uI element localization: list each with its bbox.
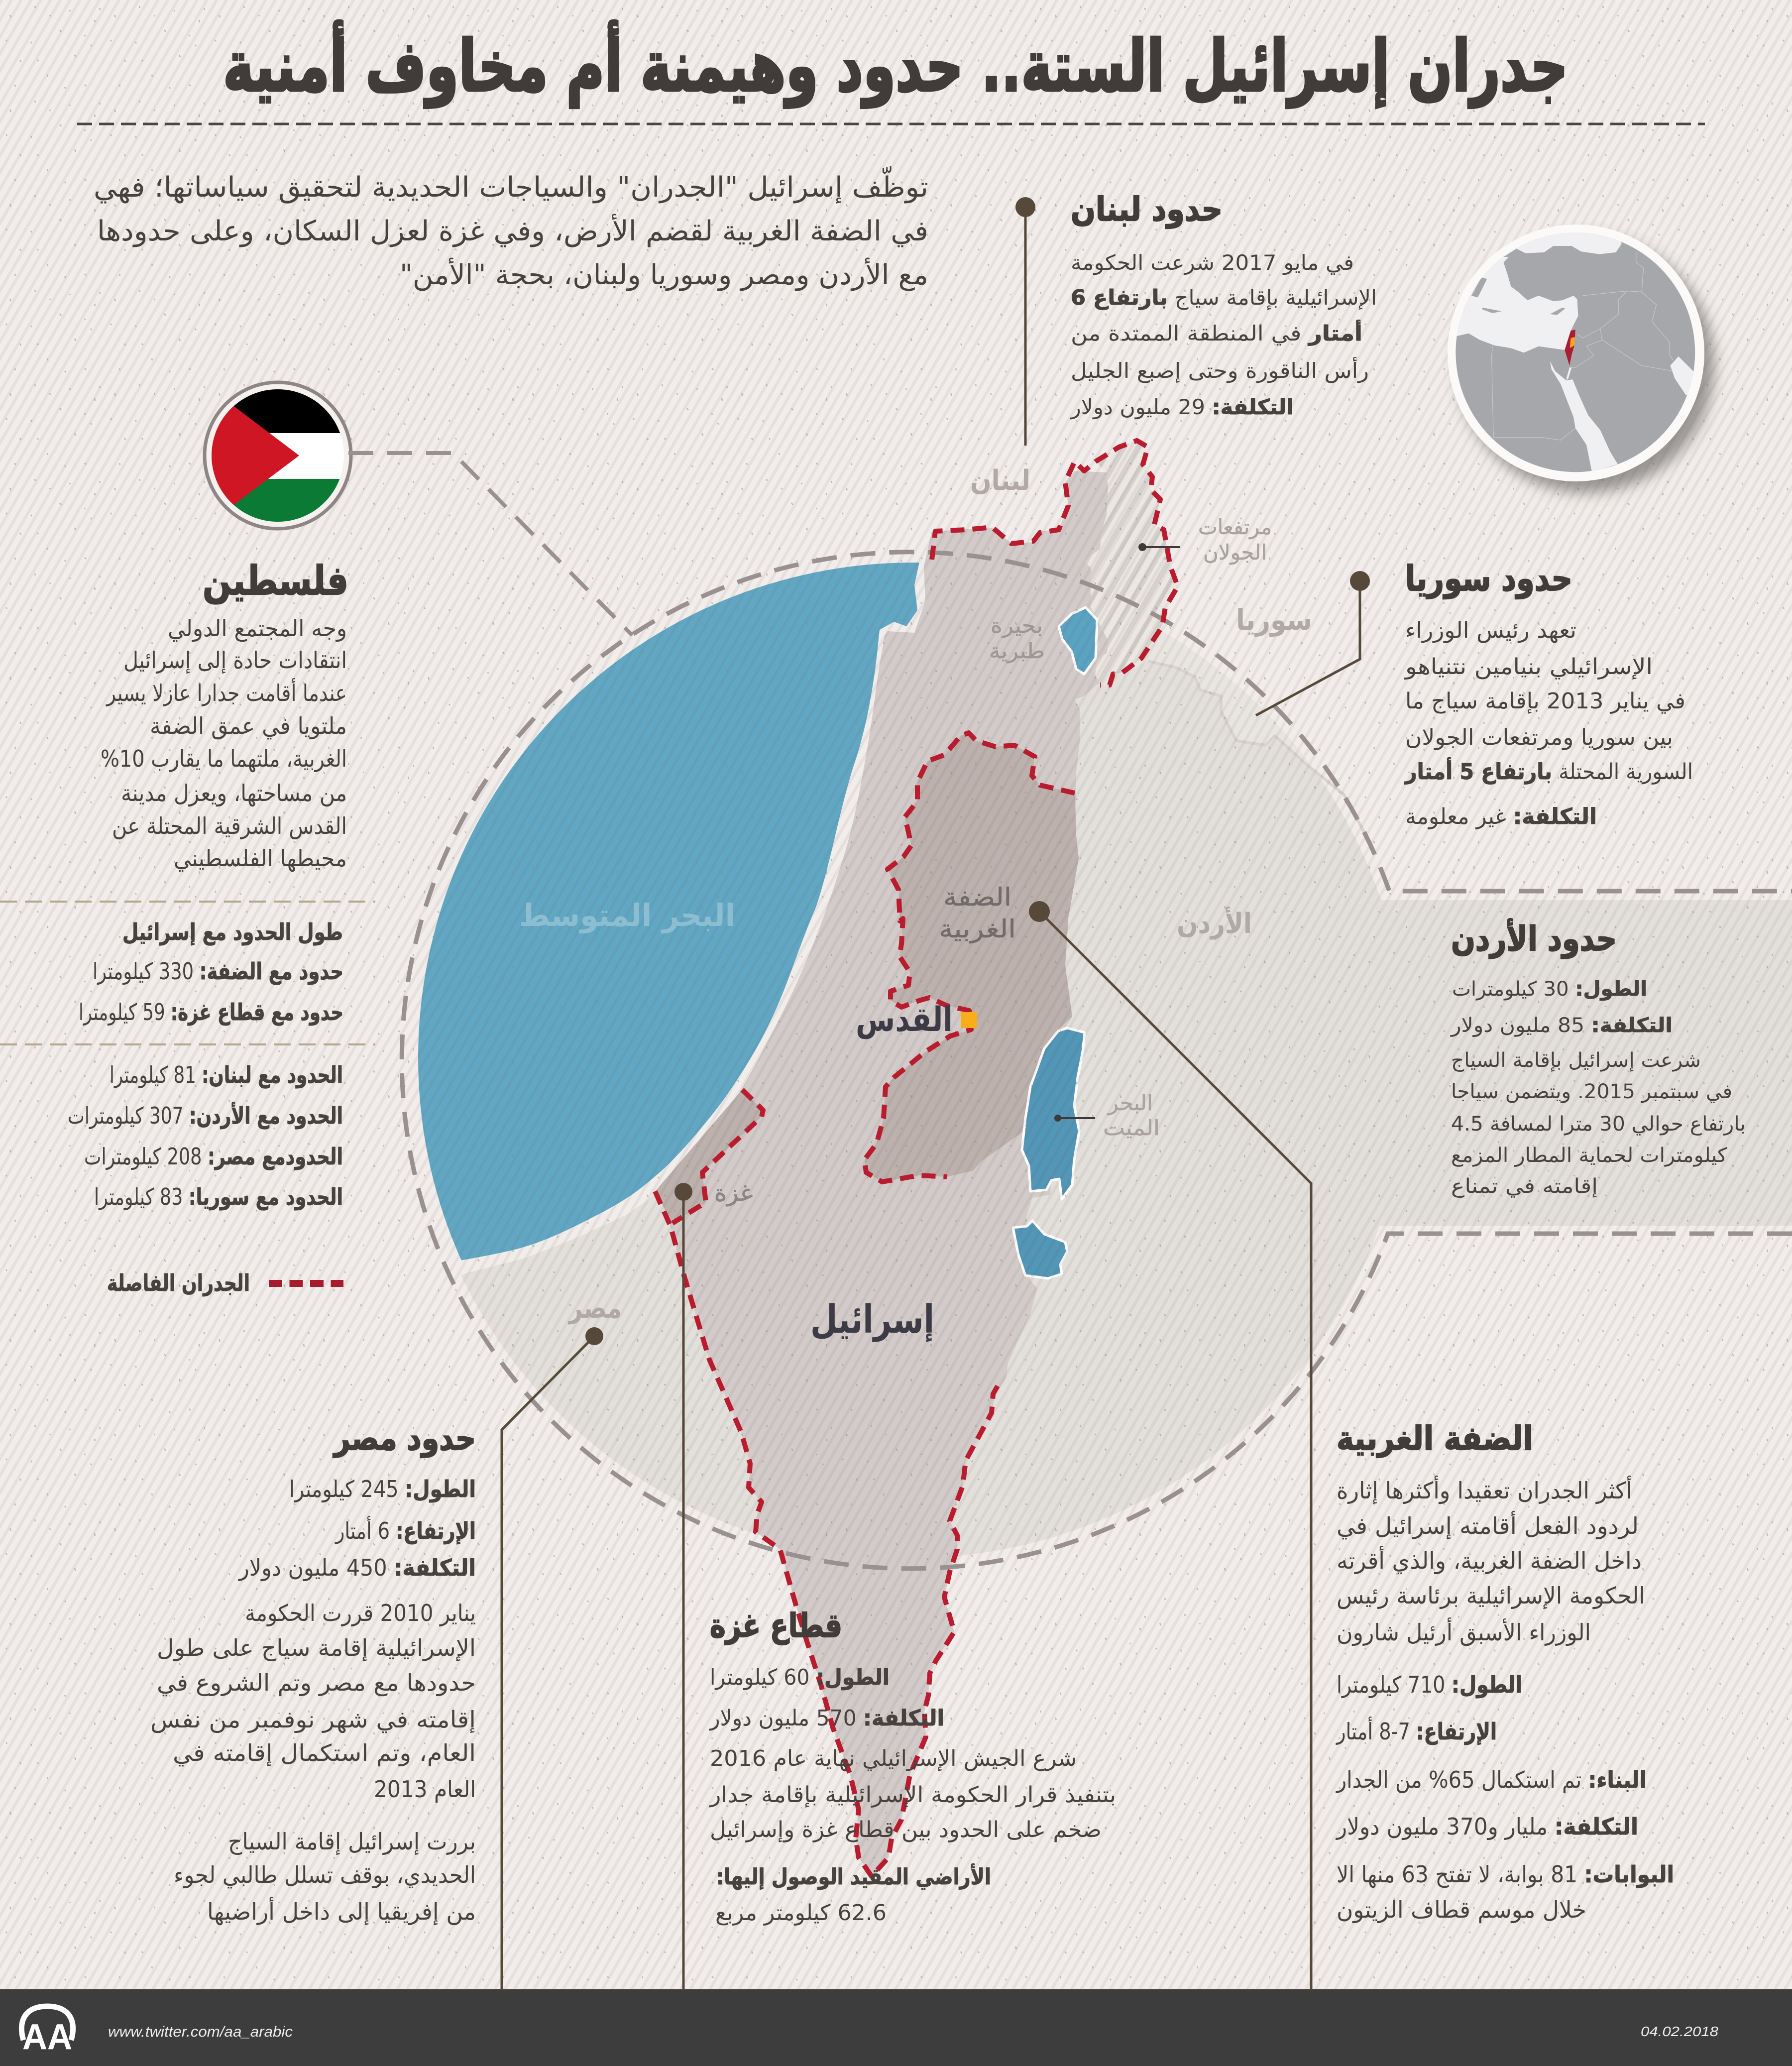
body: الطول: 710 كيلومترا — [1337, 1671, 1522, 1699]
label: Israel: إسرائيل — [810, 1297, 934, 1343]
body: الحكومة الإسرائيلية برئاسة رئيس — [1337, 1582, 1645, 1609]
border lengths with neighbours: الحدودمع مصر: 208 كيلومترات — [84, 1143, 343, 1170]
heading: الضفة الغربية — [1337, 1419, 1533, 1458]
body: بارتفاع حوالي 30 مترا لمسافة 4.5 — [1451, 1113, 1746, 1136]
map: circle dashed outline and Jordan band edges — [402, 552, 1792, 1569]
body: حدودها مع مصر وتم الشروع في — [157, 1669, 476, 1697]
intro text: مع الأردن ومصر وسوريا ولبنان، بحجة "الأمن" — [400, 257, 928, 291]
label: Jerusalem: القدس — [856, 1000, 953, 1039]
connector: flag to map — [348, 453, 632, 635]
body: البناء: تم استكمال 65% من الجدار — [1336, 1766, 1647, 1794]
intro text: في الضفة الغربية لقضم الأرض، وفي غزة لعزل السكان، وعلى حدودها — [97, 214, 928, 247]
body: رأس الناقورة وحتى إصبع الجليل — [1071, 357, 1369, 383]
body: الطول: 245 كيلومترا — [289, 1476, 476, 1503]
heading: قطاع غزة — [710, 1607, 842, 1645]
body: ملتويا في عمق الضفة — [150, 712, 347, 740]
body: وجه المجتمع الدولي — [168, 615, 347, 642]
globe shadow — [1457, 236, 1714, 493]
body — [101, 615, 347, 872]
heading: حدود لبنان — [1071, 190, 1223, 229]
body: بتنفيذ قرار الحكومة الإسرائيلية بإقامة جدار — [709, 1782, 1116, 1808]
wall: Egypt and Jordan south — [655, 1191, 999, 1876]
body: في يناير 2013 بإقامة سياج ما — [1405, 689, 1685, 714]
body — [1070, 250, 1377, 419]
label: Syria: سوريا — [1236, 603, 1312, 637]
border lengths with Palestine — [79, 918, 343, 1026]
title divider — [77, 122, 1705, 125]
region: West Bank — [865, 733, 1079, 1182]
map circle: neighbouring countries — [412, 563, 1408, 1558]
body: عندما أقامت جدارا عازلا يسير — [106, 678, 347, 707]
body: محيطها الفلسطيني — [174, 845, 347, 872]
label: Jordan: الأردن — [1177, 906, 1252, 940]
heading: حدود سوريا — [1405, 558, 1572, 599]
border lengths with neighbours: الحدود مع سوريا: 83 كيلومترا — [94, 1183, 343, 1211]
label: Golan Heights: مرتفعات — [1198, 515, 1272, 539]
body: شرع الجيش الإسرائيلي نهاية عام 2016 — [710, 1746, 1077, 1771]
body: التكلفة: 450 مليون دولار — [238, 1554, 476, 1582]
label: West Bank: الغربية — [939, 915, 1016, 943]
body: التكلفة: مليار و370 مليون دولار — [1336, 1813, 1638, 1840]
river border: Syria and Jordan — [1148, 661, 1366, 836]
region: Golan Heights — [1084, 441, 1178, 685]
panel: Jordan band background — [1294, 900, 1792, 1226]
land: Israel — [656, 471, 1109, 1876]
body: الأراضي المقيد الوصول إليها: — [716, 1863, 991, 1890]
body: العام 2013 — [374, 1776, 476, 1803]
islands — [1471, 249, 1565, 315]
sea: Mediterranean — [348, 523, 919, 1294]
border lengths with neighbours: الحدود مع لبنان: 81 كيلومترا — [110, 1061, 343, 1089]
label: Mediterranean Sea: البحر المتوسط — [519, 897, 735, 933]
label: Sea of Galilee: بحيرة — [991, 613, 1043, 638]
map: separation walls — [655, 441, 1178, 1876]
label: Gaza: غزة — [714, 1179, 753, 1207]
borders — [1492, 251, 1673, 440]
border lengths with Palestine: حدود مع الضفة: 330 كيلومترا — [93, 958, 343, 985]
border lengths with Palestine: طول الحدود مع إسرائيل — [122, 918, 343, 946]
flag of Palestine — [205, 382, 351, 529]
label: Sea of Galilee: طبرية — [989, 639, 1045, 663]
body: التكلفة: 570 مليون دولار — [709, 1706, 944, 1731]
body — [709, 1665, 1116, 1926]
locator globe — [1434, 209, 1714, 493]
wall: Lebanon and Golan — [932, 441, 1178, 685]
footer date: 04.02.2018 — [1641, 2024, 1718, 2039]
callout: West Bank — [1029, 901, 1674, 1990]
body: يناير 2010 قررت الحكومة — [245, 1600, 476, 1627]
globe ring — [1448, 225, 1704, 481]
label: Golan Heights: الجولان — [1203, 540, 1267, 565]
body: العام، وتم استكمال إقامته في — [173, 1739, 476, 1767]
flag stripes — [209, 388, 348, 524]
callout: Syria border — [1256, 558, 1693, 829]
body: انتقادات حادة إلى إسرائيل — [123, 647, 347, 674]
label: Dead Sea: البحر — [1107, 1091, 1153, 1115]
label: Egypt: مصر — [567, 1292, 622, 1325]
body: أكثر الجدران تعقيدا وأكثرها إثارة — [1337, 1476, 1632, 1504]
body: شرعت إسرائيل بإقامة السياج — [1451, 1049, 1701, 1072]
body: الإرتفاع: 7-8 أمتار — [1336, 1717, 1497, 1745]
body: الحديدي، بوقف تسلل طالبي لجوء — [174, 1861, 476, 1889]
body: بين سوريا ومرتفعات الجولان — [1405, 725, 1673, 750]
Persian Gulf — [1670, 356, 1700, 395]
Israel on globe — [1565, 330, 1575, 365]
body: الإسرائيلي بنيامين نتنياهو — [1404, 654, 1653, 680]
flag ring — [205, 382, 351, 529]
lake: Sea of Galilee — [1059, 607, 1097, 674]
body: إقامته في شهر نوفمبر من نفس — [150, 1706, 476, 1733]
body: ضخم على الحدود بين قطاع غزة وإسرائيل — [710, 1817, 1102, 1842]
body: الوزراء الأسبق أرئيل شارون — [1337, 1617, 1591, 1646]
heading: حدود الأردن — [1451, 918, 1617, 959]
body: من مساحتها، ويعزل مدينة — [121, 780, 347, 807]
lake: Dead Sea north — [1022, 1028, 1085, 1199]
map: base regions — [348, 441, 1792, 1876]
pointer — [674, 1183, 692, 1990]
body: القدس الشرقية المحتلة عن — [112, 812, 347, 840]
body: أمتار في المنطقة الممتدة من — [1071, 320, 1362, 346]
body: خلال موسم قطاف الزيتون — [1337, 1896, 1586, 1924]
callout: Egypt border — [150, 1327, 603, 1990]
callout: Jordan border — [1450, 918, 1746, 1198]
body: في مايو 2017 شرعت الحكومة — [1071, 250, 1354, 275]
legend: separation walls: الجدران الفاصلة — [107, 1269, 250, 1296]
callout: Lebanon border — [1015, 190, 1377, 446]
globe map — [1434, 209, 1700, 476]
body: الغربية، ملتهما ما يقارب 10% — [101, 745, 347, 773]
body: الطول: 30 كيلومترات — [1452, 978, 1647, 1001]
body: التكلفة: غير معلومة — [1405, 804, 1597, 829]
pointer — [1029, 901, 1311, 1990]
callout: Gaza Strip — [674, 1183, 1116, 1990]
body — [150, 1476, 476, 1926]
body: 62.6 كيلومتر مربع — [715, 1900, 887, 1926]
West Bank on globe — [1570, 337, 1575, 348]
body: لردود الفعل أقامته إسرائيل في — [1337, 1511, 1639, 1540]
body: التكلفة: 85 مليون دولار — [1450, 1014, 1673, 1037]
intro text — [94, 166, 928, 291]
body: الإرتفاع: 6 أمتار — [335, 1516, 476, 1544]
heading: فلسطين — [203, 558, 348, 604]
footer link: www.twitter.com/aa_arabic — [108, 2024, 293, 2040]
panel: Palestine — [0, 558, 375, 1296]
Red Sea — [1550, 361, 1618, 472]
body: بررت إسرائيل إقامة السياج — [228, 1828, 476, 1855]
body: كيلومترات لحماية المطار المزمع — [1451, 1144, 1728, 1167]
region: Syria strip inside circle — [1100, 498, 1493, 896]
wall: Gaza — [672, 1090, 763, 1223]
label: Lebanon: لبنان — [970, 464, 1030, 497]
label: West Bank — [939, 883, 1016, 943]
label: Dead Sea — [1054, 1091, 1160, 1140]
body — [1404, 618, 1693, 829]
body: التكلفة: 29 مليون دولار — [1070, 395, 1294, 419]
footer bar — [0, 1989, 1792, 2066]
body: الطول: 60 كيلومترا — [710, 1665, 890, 1690]
body: داخل الضفة الغربية، والذي أقرته — [1337, 1546, 1642, 1575]
region: Gaza Strip — [655, 1090, 763, 1223]
body: البوابات: 81 بوابة، لا تفتح 63 منها الا — [1337, 1861, 1674, 1888]
body: تعهد رئيس الوزراء — [1405, 618, 1576, 643]
marker: Jerusalem — [961, 1012, 977, 1028]
body: السورية المحتلة بارتفاع 5 أمتار — [1404, 757, 1693, 785]
body: الإسرائيلية إقامة سياج على طول — [157, 1634, 476, 1662]
border lengths with neighbours — [68, 1061, 343, 1211]
label: Sea of Galilee — [989, 613, 1045, 663]
border lengths with neighbours: الحدود مع الأردن: 307 كيلومترات — [68, 1102, 343, 1130]
label: Golan Heights — [1138, 515, 1272, 565]
heading: حدود مصر — [333, 1419, 476, 1458]
pointer — [1015, 197, 1035, 446]
logo: Anadolu Agency: AA — [22, 2017, 72, 2057]
pointer — [502, 1327, 603, 1990]
pointer — [1256, 571, 1370, 715]
map labels — [519, 464, 1312, 1343]
coast strip — [348, 523, 932, 1314]
label: West Bank: الضفة — [943, 883, 1011, 912]
intro text: توظّف إسرائيل "الجدران" والسياجات الحديدية لتحقيق سياساتها؛ فهي — [94, 166, 928, 204]
body: من إفريقيا إلى داخل أراضيها — [207, 1897, 476, 1926]
body — [1450, 978, 1746, 1198]
lake: Dead Sea south — [1013, 1221, 1067, 1278]
label: Dead Sea: الميت — [1103, 1116, 1160, 1140]
body: إقامته في تمناع — [1451, 1175, 1598, 1198]
border lengths with Palestine: حدود مع قطاع غزة: 59 كيلومترا — [79, 999, 343, 1026]
body: الإسرائيلية بإقامة سياج بارتفاع 6 — [1071, 285, 1377, 310]
wall: West Bank — [865, 733, 1075, 1182]
body — [1336, 1476, 1674, 1924]
body: في سبتمبر 2015. ويتضمن سياجا — [1451, 1080, 1732, 1103]
Mediterranean and Black Sea — [1434, 209, 1621, 353]
